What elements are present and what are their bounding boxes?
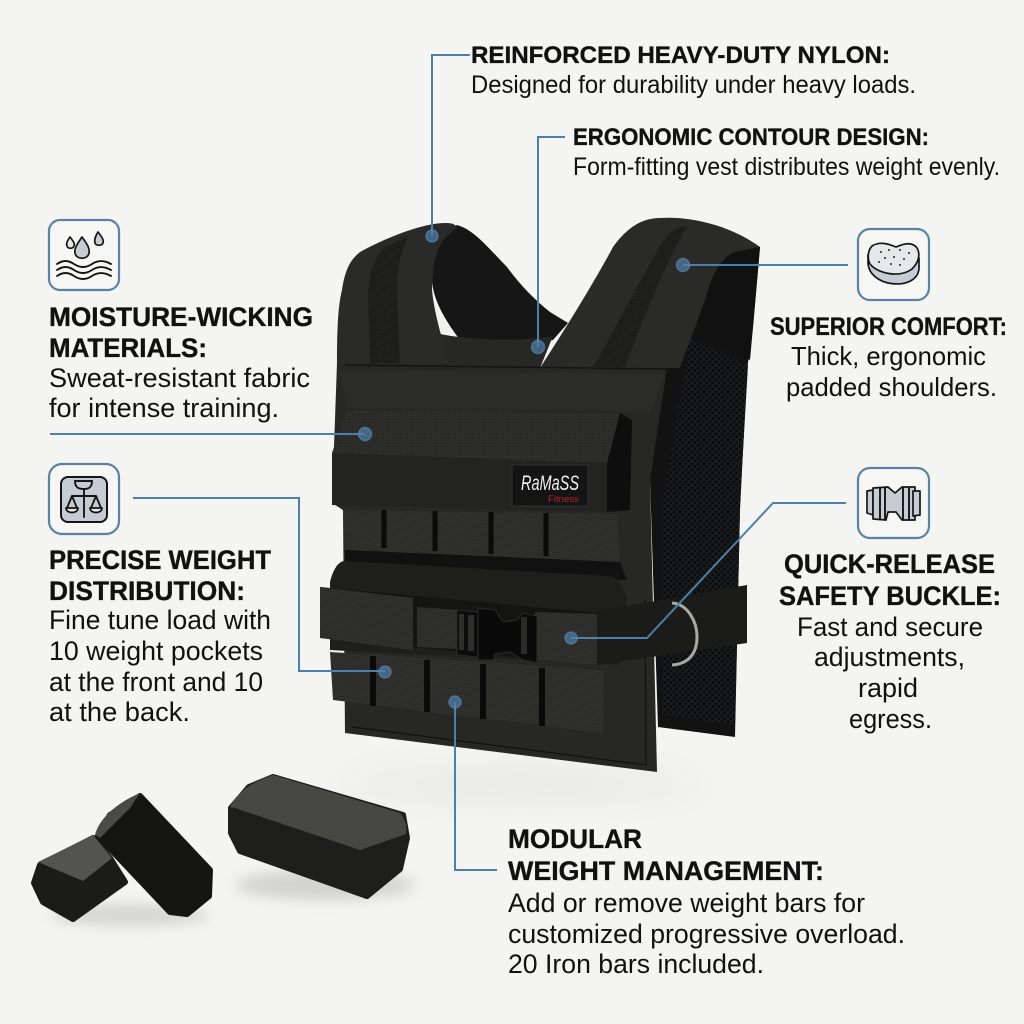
text: safety buckle: QUICK-RELEASE <box>784 549 995 579</box>
chest panel <box>332 334 667 772</box>
chest shading band <box>338 370 665 412</box>
text: modular weight: WEIGHT MANAGEMENT: <box>508 856 824 886</box>
gap under collar <box>433 297 453 333</box>
icon: water drops and waves <box>49 220 119 290</box>
pouch front below flap <box>332 453 607 512</box>
right strap webbing <box>593 226 688 367</box>
text: superior comfort: padded shoulders. <box>786 372 997 402</box>
text: safety buckle: Fast and secure <box>797 612 983 642</box>
text: safety buckle <box>779 549 1001 734</box>
text: safety buckle: adjustments, <box>814 642 965 672</box>
left shoulder strap <box>337 223 457 363</box>
lower weight pockets <box>330 652 603 733</box>
back panel <box>650 230 760 737</box>
text: weight distribution: PRECISE WEIGHT <box>49 545 271 575</box>
text: reinforced nylon <box>471 42 916 99</box>
shadow: small bars <box>50 905 210 925</box>
text: reinforced nylon: REINFORCED HEAVY-DUTY NYLON: <box>471 42 890 69</box>
brand label <box>512 465 588 506</box>
weighted vest illustration <box>320 218 760 772</box>
middle bar <box>95 793 210 914</box>
text: moisture wicking: MATERIALS: <box>49 333 207 363</box>
leader: superior comfort <box>676 258 848 272</box>
buckle <box>457 608 537 663</box>
leader: reinforced nylon <box>426 55 470 242</box>
mesh side panel <box>662 338 748 725</box>
text: modular weight: customized progressive overload. <box>508 919 905 949</box>
bar shadows <box>235 870 415 900</box>
icon: buckle <box>858 468 929 538</box>
right shoulder strap <box>540 218 760 368</box>
neck collar lining <box>432 225 568 345</box>
text: weight distribution: DISTRIBUTION: <box>49 576 245 606</box>
text: weight distribution: 10 weight pockets <box>49 636 263 666</box>
text: moisture wicking: for intense training. <box>49 393 279 423</box>
text: superior comfort <box>770 313 1007 402</box>
leader: moisture wicking <box>50 428 372 440</box>
text: superior comfort: Thick, ergonomic <box>791 341 986 371</box>
text: ergonomic contour <box>573 124 1000 181</box>
leader: safety buckle <box>565 503 846 644</box>
left strap webbing <box>368 236 408 363</box>
D-ring <box>672 603 697 665</box>
text: weight distribution: Fine tune load with <box>49 605 271 635</box>
pouch side <box>607 413 632 512</box>
leader: weight distribution <box>133 498 391 678</box>
text: weight distribution: at the front and 10 <box>49 667 263 697</box>
left bar <box>34 835 125 919</box>
brand label: Fitness <box>548 494 580 504</box>
brand label: RaMaSS <box>521 472 579 495</box>
icon: balance scale <box>49 464 119 534</box>
icon: foam pad <box>858 229 929 300</box>
weight bars <box>34 775 415 925</box>
text: ergonomic contour: Form-fitting vest distributes weight evenly. <box>573 153 1000 181</box>
chest seam <box>345 365 667 369</box>
lower pouch <box>330 561 627 665</box>
inner shoulder padding <box>693 247 760 360</box>
text: moisture wicking: Sweat-resistant fabric <box>49 363 310 393</box>
bottom panel seam <box>352 600 646 765</box>
upper weight pockets <box>343 510 627 580</box>
text: modular weight: MODULAR <box>508 824 642 854</box>
text: reinforced nylon: Designed for durability under heavy loads. <box>471 71 916 99</box>
leader: modular weight <box>449 696 497 870</box>
text: modular weight: 20 Iron bars included. <box>508 949 764 979</box>
large bar <box>230 775 407 896</box>
text: safety buckle: egress. <box>849 704 932 734</box>
top flap <box>332 410 620 463</box>
text: weight distribution <box>49 545 271 727</box>
text: modular weight <box>508 824 905 979</box>
text: moisture wicking: MOISTURE-WICKING <box>49 302 313 332</box>
text: weight distribution: at the back. <box>49 697 190 727</box>
text: modular weight: Add or remove weight bars for <box>508 888 865 918</box>
text: safety buckle: rapid <box>858 673 918 703</box>
floor shadow under vest <box>330 773 710 797</box>
text: ergonomic contour: ERGONOMIC CONTOUR DESIGN: <box>573 124 929 151</box>
leader: ergonomic contour <box>532 137 565 354</box>
text: moisture wicking <box>49 302 313 423</box>
text: safety buckle: SAFETY BUCKLE: <box>779 581 1001 611</box>
waist belt <box>320 585 747 665</box>
